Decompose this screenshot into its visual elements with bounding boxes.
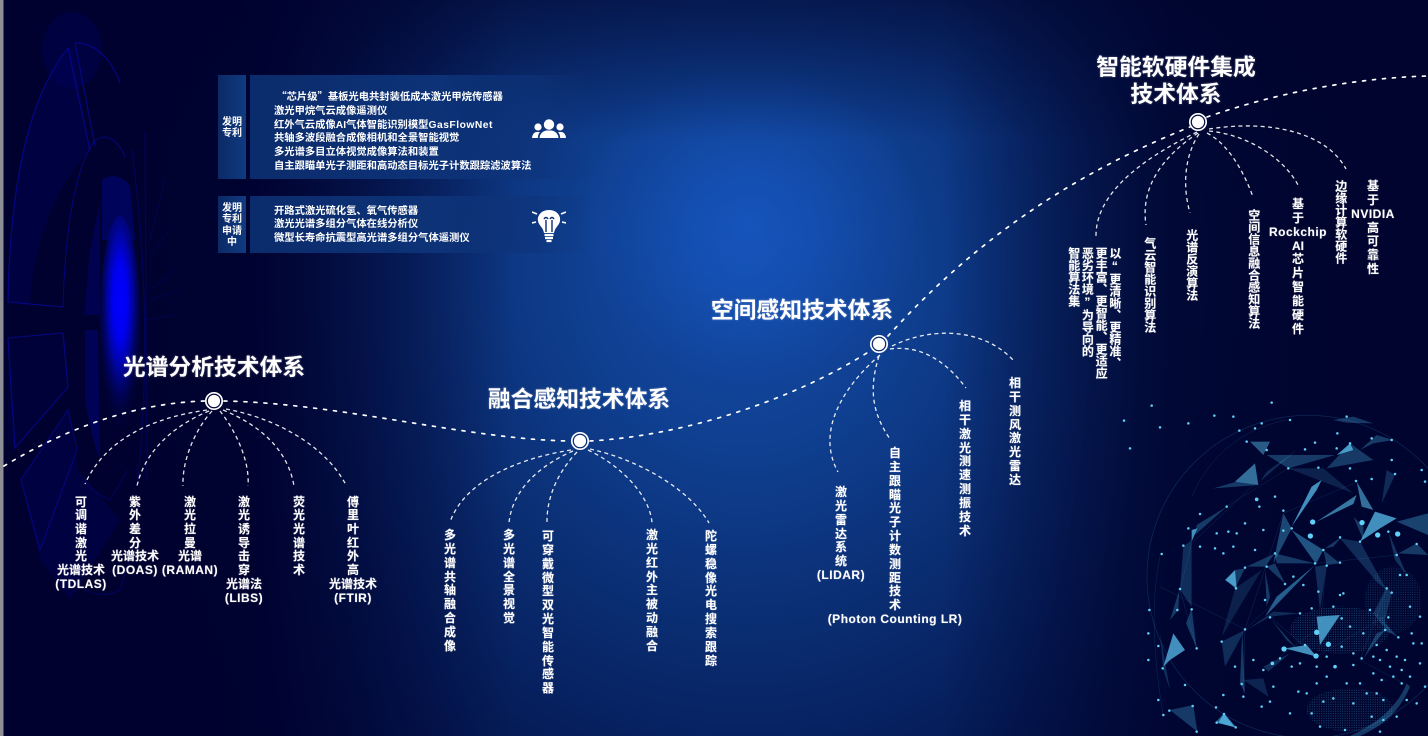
fusion item: wearable sensor: 穿 xyxy=(542,543,554,557)
spatial item: coherent wind lidar: 达 xyxy=(1009,473,1021,487)
fusion item: panoramic vision: 多 xyxy=(503,528,515,542)
pending patents list: 开路式激光硫化氢、氧气传感器 xyxy=(274,206,418,216)
spectral item: TDLAS: 激 xyxy=(75,536,87,550)
spectral item: RAMAN: (RAMAN) xyxy=(162,563,218,577)
spatial item: photon counting ranging: 光 xyxy=(889,501,901,515)
spatial item: photon counting ranging: 自 xyxy=(889,446,901,460)
spatial item: photon counting ranging: (Photon Counting LR) xyxy=(828,612,962,626)
integration item: edge computing: 边缘计算软硬件 xyxy=(1334,180,1348,264)
integration item: spectral inversion: 光谱反演算法 xyxy=(1185,229,1199,301)
integration item: intelligent algorithm set: 以“更清晰、更精准、 xyxy=(1108,247,1122,369)
spatial item: photon counting ranging: 计 xyxy=(889,529,901,543)
fusion item: wearable sensor xyxy=(542,529,554,695)
node: fusion sensing xyxy=(570,432,589,450)
fusion item: panoramic vision xyxy=(502,528,516,625)
fusion item: coaxial imaging: 融 xyxy=(444,597,456,611)
pending patents list: 微型长寿命抗震型高光谱多组分气体遥测仪 xyxy=(274,233,470,244)
spectral item: RAMAN: 曼 xyxy=(184,536,196,550)
spatial item: coherent laser vibrometry: 技 xyxy=(959,510,971,524)
spatial item: photon counting ranging: 数 xyxy=(889,543,901,557)
spatial item: coherent wind lidar: 相 xyxy=(1009,376,1021,390)
spectral item: DOAS: 紫 xyxy=(129,494,141,508)
integration item: Rockchip hardware: 于 xyxy=(1292,211,1304,225)
spatial item: coherent laser vibrometry: 干 xyxy=(959,413,971,427)
integration item: Rockchip hardware: Rockchip xyxy=(1269,225,1327,239)
fusion item: panoramic vision: 觉 xyxy=(503,611,515,625)
icon: light bulb xyxy=(532,210,566,242)
fusion item: wearable sensor: 戴 xyxy=(542,557,554,571)
heading: software hardware integration: 智能软硬件集成 xyxy=(1096,54,1256,80)
spatial item: LIDAR: 达 xyxy=(835,527,847,541)
integration item: Rockchip hardware: 能 xyxy=(1292,294,1304,308)
integration item: NVIDIA reliability: 高 xyxy=(1367,221,1379,235)
spatial item: coherent laser vibrometry: 光 xyxy=(959,441,971,455)
spectral item: LIBS: 击 xyxy=(238,549,250,563)
fusion item: wearable sensor: 双 xyxy=(542,598,554,612)
spectral item: DOAS: (DOAS) xyxy=(112,563,158,577)
integration item: Rockchip hardware: 基 xyxy=(1292,197,1304,211)
integration item: NVIDIA reliability: 基 xyxy=(1367,179,1379,193)
label: granted patents: 专利 xyxy=(222,128,242,139)
spatial item: coherent wind lidar: 雷 xyxy=(1009,459,1021,473)
fusion item: coaxial imaging: 共 xyxy=(444,570,456,584)
spectral item: LIBS: 光谱法 xyxy=(226,577,262,591)
fusion item: laser infrared fusion: 融 xyxy=(646,625,658,639)
spatial item: coherent laser vibrometry: 振 xyxy=(959,496,971,510)
label: granted patents: 发明 xyxy=(222,117,242,128)
fusion item: gyro stabilised tracking: 螺 xyxy=(705,543,717,557)
spectral item: FTIR: 外 xyxy=(347,549,359,563)
integration item: NVIDIA reliability: 性 xyxy=(1367,262,1379,276)
spatial item: coherent laser vibrometry xyxy=(958,399,972,538)
spectral item: fluorescence: 光 xyxy=(293,508,305,522)
fusion item: gyro stabilised tracking: 搜 xyxy=(705,612,717,626)
spectral item: TDLAS: 谐 xyxy=(75,522,87,536)
spatial item: coherent wind lidar: 风 xyxy=(1009,418,1021,432)
spectral item: fluorescence xyxy=(292,494,306,577)
fusion item: panoramic vision: 景 xyxy=(503,583,515,597)
spatial item: photon counting ranging: 测 xyxy=(889,557,901,571)
spectral item: TDLAS: 光 xyxy=(75,549,87,563)
spectral item: fluorescence: 光 xyxy=(293,522,305,536)
integration item: intelligent algorithm set xyxy=(1067,246,1122,380)
fusion item: laser infrared fusion: 光 xyxy=(646,542,658,556)
patents list: 红外气云成像AI气体智能识别模型GasFlowNet xyxy=(274,120,493,131)
heading: spatial sensing: 空间感知技术体系 xyxy=(711,297,893,323)
fusion item: coaxial imaging: 轴 xyxy=(444,583,456,597)
fusion item: laser infrared fusion: 外 xyxy=(646,570,658,584)
fusion item: wearable sensor: 能 xyxy=(542,640,554,654)
spectral item: TDLAS: (TDLAS) xyxy=(55,577,107,591)
spectral item: FTIR: (FTIR) xyxy=(334,591,372,605)
fusion item: wearable sensor: 光 xyxy=(542,612,554,626)
spatial item: LIDAR: 雷 xyxy=(835,513,847,527)
spectral item: fluorescence: 谱 xyxy=(293,536,305,550)
spatial item: coherent laser vibrometry: 相 xyxy=(959,399,971,413)
spatial item: LIDAR: 光 xyxy=(835,499,847,513)
fusion item: coaxial imaging: 多 xyxy=(444,528,456,542)
node: spatial sensing xyxy=(870,335,888,353)
spectral item: LIBS: 导 xyxy=(238,536,250,550)
patents list: 激光甲烷气云成像遥测仪 xyxy=(274,106,387,117)
spatial item: photon counting ranging: 距 xyxy=(889,571,901,585)
spectral item: FTIR: 傅 xyxy=(347,494,359,508)
spatial item: LIDAR: 统 xyxy=(835,554,847,568)
fusion item: panoramic vision: 谱 xyxy=(503,556,515,570)
spectral item: fluorescence: 术 xyxy=(293,563,305,577)
spectral item: FTIR: 红 xyxy=(347,536,359,550)
integration item: intelligent algorithm set: 恶劣环境”为导向的 xyxy=(1080,247,1094,357)
integration item: NVIDIA reliability: 可 xyxy=(1367,234,1379,248)
fusion item: laser infrared fusion: 合 xyxy=(646,639,658,653)
panel: patents pending xyxy=(218,196,470,253)
fusion item: gyro stabilised tracking: 光 xyxy=(705,584,717,598)
spatial item: photon counting ranging: 术 xyxy=(889,598,901,612)
spectral item: LIBS: 激 xyxy=(238,494,250,508)
fusion item: wearable sensor: 器 xyxy=(542,681,554,695)
patents list: “芯片级”基板光电共封装低成本激光甲烷传感器 xyxy=(276,88,503,103)
integration item: intelligent algorithm set: 更丰富、更智能、更适应 xyxy=(1094,247,1108,379)
integration item: Rockchip hardware: 件 xyxy=(1292,322,1304,336)
fusion item: laser infrared fusion: 被 xyxy=(646,597,658,611)
spatial item: photon counting ranging: 技 xyxy=(889,584,901,598)
spectral item: DOAS: 外 xyxy=(129,508,141,522)
spatial item: LIDAR: (LIDAR) xyxy=(817,568,865,582)
fusion item: laser infrared fusion xyxy=(646,528,658,653)
spectral item: LIBS xyxy=(225,494,263,605)
spectral item: LIBS: 诱 xyxy=(238,522,250,536)
spatial item: photon counting ranging xyxy=(828,446,962,626)
spectral item: TDLAS: 可 xyxy=(75,494,87,508)
fusion item: wearable sensor: 传 xyxy=(542,654,554,668)
label: granted patents xyxy=(218,75,246,179)
fusion item: laser infrared fusion: 动 xyxy=(646,611,658,625)
fusion item: wearable sensor: 微 xyxy=(542,571,554,585)
spectral item: LIBS: 穿 xyxy=(238,563,250,577)
spectral item: FTIR: 高 xyxy=(347,563,359,577)
node: spectral analysis xyxy=(205,392,223,410)
integration item: NVIDIA reliability xyxy=(1351,179,1395,276)
spectral item: fluorescence: 荧 xyxy=(293,494,305,508)
fusion item: wearable sensor: 智 xyxy=(542,626,554,640)
patents list: 共轴多波段融合成像相机和全景智能视觉 xyxy=(274,133,459,144)
spatial item: coherent laser vibrometry: 速 xyxy=(959,468,971,482)
spectral item: TDLAS xyxy=(55,494,107,591)
spectral item: FTIR: 叶 xyxy=(347,522,359,536)
spectral item: LIBS: 光 xyxy=(238,508,250,522)
spectral item: RAMAN: 激 xyxy=(184,494,196,508)
integration item: Rockchip hardware xyxy=(1269,197,1327,336)
spectral item: RAMAN: 拉 xyxy=(184,522,196,536)
spatial item: photon counting ranging: 子 xyxy=(889,515,901,529)
integration item: gas cloud recognition: 气云智能识别算法 xyxy=(1143,237,1157,333)
spatial item: photon counting ranging: 瞄 xyxy=(889,488,901,502)
spatial item: coherent wind lidar: 激 xyxy=(1009,431,1021,445)
patents list xyxy=(250,75,590,179)
spatial item: coherent laser vibrometry: 激 xyxy=(959,427,971,441)
spectral item: DOAS: 分 xyxy=(129,536,141,550)
spectral item: RAMAN: 光谱 xyxy=(178,549,202,563)
node: software hardware integration xyxy=(1188,113,1208,131)
spatial item: coherent wind lidar xyxy=(1008,376,1022,487)
spectral item: FTIR: 里 xyxy=(347,508,359,522)
integration item: Rockchip hardware: AI xyxy=(1292,239,1304,253)
fusion item: coaxial imaging: 合 xyxy=(444,611,456,625)
fusion item: wearable sensor: 可 xyxy=(542,529,554,543)
spectral item: DOAS: 差 xyxy=(129,522,141,536)
heading: software hardware integration xyxy=(1096,54,1256,107)
heading: software hardware integration: 技术体系 xyxy=(1130,81,1222,107)
fusion item: gyro stabilised tracking xyxy=(704,529,718,668)
spatial item: coherent laser vibrometry: 测 xyxy=(959,454,971,468)
fusion item: panoramic vision: 视 xyxy=(503,597,515,611)
integration item: intelligent algorithm set: 智能算法集 xyxy=(1067,247,1081,307)
fusion item: panoramic vision: 全 xyxy=(503,570,515,584)
spectral item: TDLAS: 调 xyxy=(75,508,87,522)
fusion item: laser infrared fusion: 激 xyxy=(646,528,658,542)
fusion item: coaxial imaging: 谱 xyxy=(444,556,456,570)
spatial item: coherent wind lidar: 光 xyxy=(1009,445,1021,459)
icon: people group xyxy=(532,119,566,138)
spatial item: coherent laser vibrometry: 术 xyxy=(959,524,971,538)
integration item: Rockchip hardware: 智 xyxy=(1292,280,1304,294)
fusion item: wearable sensor: 型 xyxy=(542,584,554,598)
spectral item: DOAS: 光谱技术 xyxy=(111,549,159,563)
integration item: NVIDIA reliability: 于 xyxy=(1367,193,1379,207)
spectral item: TDLAS: 光谱技术 xyxy=(57,563,105,577)
spectral item: FTIR xyxy=(329,494,377,605)
spectral item: LIBS: (LIBS) xyxy=(225,591,263,605)
fusion item: coaxial imaging: 像 xyxy=(444,639,456,653)
fusion item: gyro stabilised tracking: 像 xyxy=(705,571,717,585)
fusion item: gyro stabilised tracking: 电 xyxy=(705,598,717,612)
heading: fusion sensing: 融合感知技术体系 xyxy=(488,386,670,412)
spatial item: LIDAR xyxy=(817,485,865,582)
spectral item: RAMAN: 光 xyxy=(184,508,196,522)
spectral item: RAMAN xyxy=(162,494,218,577)
fusion item: coaxial imaging xyxy=(444,528,456,653)
fusion item: gyro stabilised tracking: 索 xyxy=(705,626,717,640)
fusion item: wearable sensor: 感 xyxy=(542,667,554,681)
label: patents pending: 专利 xyxy=(222,214,242,225)
patents list: 多光谱多目立体视觉成像算法和装置 xyxy=(274,147,439,158)
spatial item: photon counting ranging: 主 xyxy=(889,460,901,474)
label: patents pending: 中 xyxy=(227,237,237,248)
integration item: Rockchip hardware: 芯 xyxy=(1292,252,1304,266)
label: patents pending: 申请 xyxy=(222,226,242,236)
spectral item: fluorescence: 技 xyxy=(293,549,305,563)
pending patents list: 激光光谱多组分气体在线分析仪 xyxy=(274,219,418,230)
fusion item: gyro stabilised tracking: 陀 xyxy=(705,529,717,543)
spatial item: photon counting ranging: 跟 xyxy=(889,474,901,488)
fusion item: gyro stabilised tracking: 稳 xyxy=(705,557,717,571)
panel: granted invention patents xyxy=(218,75,548,179)
integration item: spatial information fusion: 空间信息融合感知算法 xyxy=(1247,209,1261,329)
spatial item: coherent laser vibrometry: 测 xyxy=(959,482,971,496)
patents list: 自主跟瞄单光子测距和高动态目标光子计数跟踪滤波算法 xyxy=(274,161,531,172)
fusion item: laser infrared fusion: 主 xyxy=(646,583,658,597)
spatial item: LIDAR: 激 xyxy=(835,485,847,499)
heading: spectral analysis: 光谱分析技术体系 xyxy=(123,354,305,380)
pending patents list xyxy=(250,196,590,253)
label: patents pending xyxy=(218,196,246,253)
integration item: Rockchip hardware: 片 xyxy=(1292,266,1304,280)
spatial item: coherent wind lidar: 测 xyxy=(1009,404,1021,418)
fusion item: coaxial imaging: 光 xyxy=(444,542,456,556)
integration item: NVIDIA reliability: 靠 xyxy=(1367,248,1379,262)
spectral item: DOAS xyxy=(111,494,159,577)
label: patents pending: 发明 xyxy=(222,203,242,214)
integration item: Rockchip hardware: 硬 xyxy=(1292,308,1304,322)
fusion item: laser infrared fusion: 红 xyxy=(646,556,658,570)
spatial item: LIDAR: 系 xyxy=(835,540,847,554)
fusion item: panoramic vision: 光 xyxy=(503,542,515,556)
fusion item: gyro stabilised tracking: 踪 xyxy=(705,654,717,668)
spatial item: coherent wind lidar: 干 xyxy=(1009,390,1021,404)
globe network xyxy=(1122,401,1428,736)
fusion item: coaxial imaging: 成 xyxy=(444,625,456,639)
fusion item: gyro stabilised tracking: 跟 xyxy=(705,640,717,654)
spectral item: FTIR: 光谱技术 xyxy=(329,577,377,591)
integration item: NVIDIA reliability: NVIDIA xyxy=(1351,207,1395,221)
